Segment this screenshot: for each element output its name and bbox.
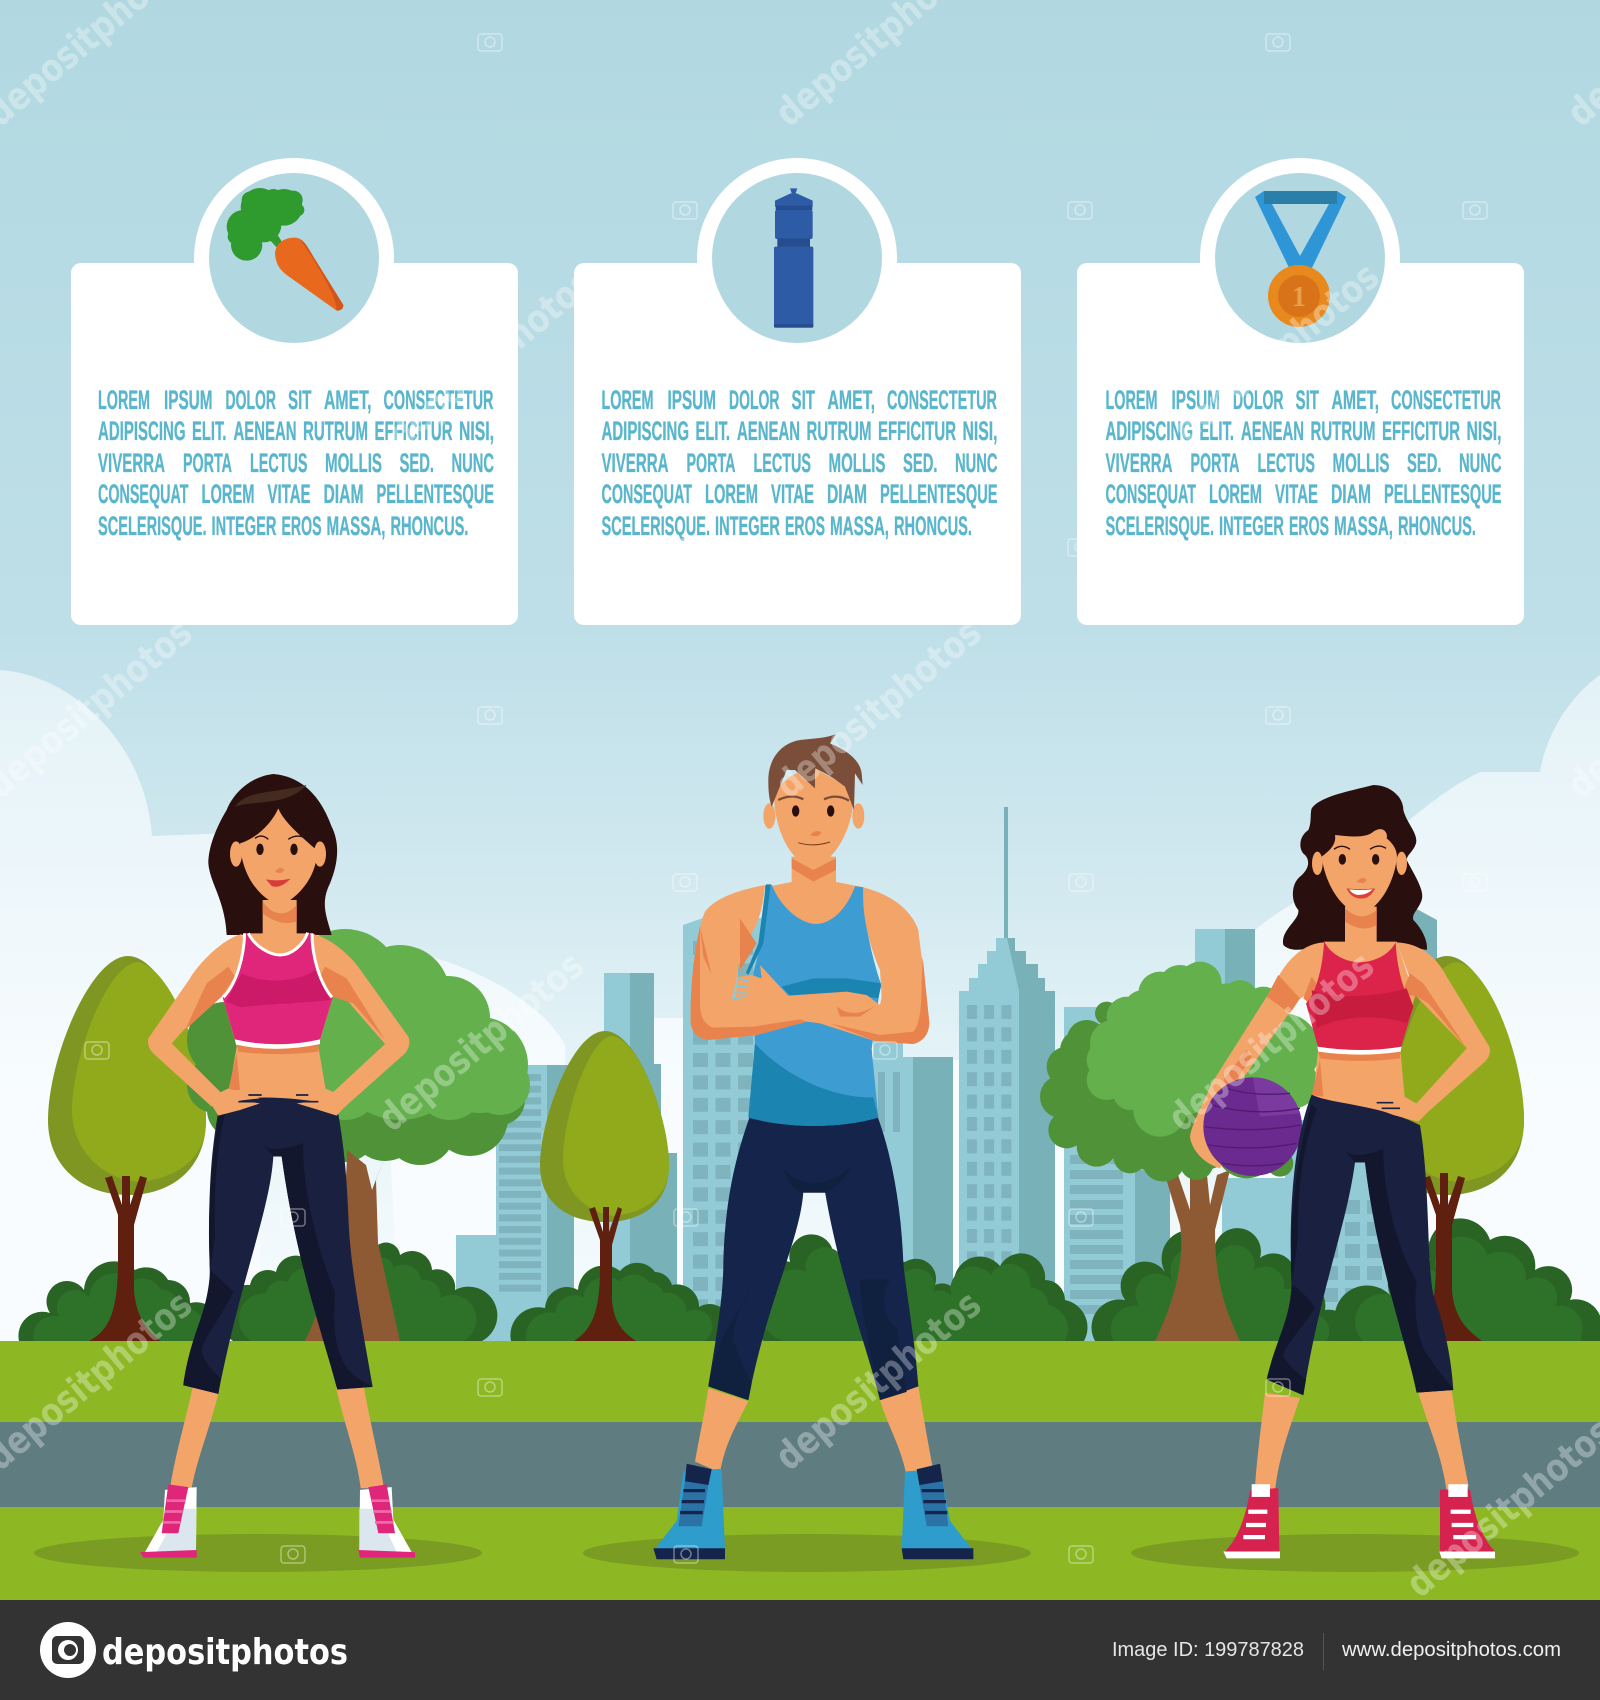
face (1312, 829, 1407, 915)
building: right of centre (873, 1035, 953, 1341)
shoe right (1439, 1484, 1495, 1558)
tree: round green right (1040, 962, 1320, 1341)
crossed arms (691, 885, 929, 1044)
building: centre tower (683, 918, 770, 1341)
text block: DIAM (1331, 479, 1371, 509)
text block: IPSUM (1172, 385, 1220, 415)
shoe left (1223, 1484, 1280, 1558)
text block: INTEGER (212, 511, 276, 541)
text block (98, 385, 494, 541)
text block: NUNC (452, 448, 494, 478)
text block: CONSECTETUR (384, 385, 494, 415)
text block: DOLOR (226, 385, 276, 415)
text block: NUNC (1459, 448, 1502, 478)
panel: nutrition card (71, 158, 518, 625)
text block: ELIT. (192, 416, 226, 446)
upper body (691, 734, 929, 1044)
text block: IPSUM (164, 385, 212, 415)
icon circle (209, 173, 379, 343)
text block: SED. (903, 448, 938, 478)
text block: RUTRUM (806, 416, 872, 446)
panel: hydration card (574, 158, 1021, 625)
text block: ELIT. (696, 416, 730, 446)
text block: EFFICITUR (1382, 416, 1460, 446)
text block: SIT (1296, 385, 1319, 415)
text block: MOLLIS (828, 448, 886, 478)
logo wordmark: depositphotos (102, 1632, 348, 1673)
text block: PELLENTESQUE (880, 479, 998, 509)
watermarks: depositphotos (370, 943, 592, 1140)
legs (140, 1097, 415, 1558)
text block: MOLLIS (325, 448, 382, 478)
chest (765, 882, 863, 950)
hands on hips (212, 1088, 343, 1116)
building: striped block (496, 1065, 574, 1341)
shoe right (358, 1484, 415, 1558)
icon circle (1215, 173, 1385, 343)
text block: INTEGER (1219, 511, 1284, 541)
text block: LOREM (1106, 385, 1157, 415)
text block: AENEAN (1241, 416, 1304, 446)
text block: IPSUM (668, 385, 716, 415)
text block: NISI, (459, 416, 494, 446)
fingers (733, 978, 750, 999)
text block: INTEGER (715, 511, 780, 541)
watermarks: depositphotos (1165, 254, 1387, 451)
hair (208, 774, 337, 935)
text block: CONSECTETUR (887, 385, 997, 415)
sports top (1306, 941, 1413, 1054)
text block: CONSEQUAT (1106, 479, 1196, 509)
text block: RUTRUM (303, 416, 368, 446)
text block: MASSA, (326, 511, 386, 541)
text block: EFFICITUR (374, 416, 452, 446)
text block: ADIPISCING (98, 416, 186, 446)
text block: PORTA (1190, 448, 1240, 478)
text block: NUNC (955, 448, 998, 478)
calves (170, 1384, 384, 1488)
text block: LECTUS (250, 448, 308, 478)
background: sky (0, 0, 1600, 1345)
tank detail (746, 884, 882, 998)
text block: RHONCUS. (1398, 511, 1476, 541)
calves (1255, 1390, 1469, 1492)
ground: upper grass (0, 1341, 1600, 1422)
clouds (0, 670, 1600, 1345)
leggings (1267, 1095, 1453, 1395)
building: skyscraper with antenna (959, 807, 1055, 1341)
text block (1106, 385, 1502, 541)
text block: AENEAN (234, 416, 296, 446)
watermark camera marks (85, 34, 1487, 1563)
watermarks: depositphotos (1160, 943, 1382, 1140)
text block: DIAM (827, 479, 867, 509)
building: tall stepped block shade (630, 973, 677, 1341)
building: striped right block (1064, 1007, 1170, 1341)
icon circle (712, 173, 882, 343)
figure: woman with exercise ball (1190, 785, 1495, 1558)
text block: AENEAN (737, 416, 800, 446)
building: low left block (456, 1235, 506, 1341)
text block: AMET, (828, 385, 875, 415)
shoe left (140, 1484, 197, 1558)
ground: road (0, 1422, 1600, 1507)
text block: EFFICITUR (878, 416, 956, 446)
figure: man in blue tank top (653, 734, 973, 1559)
calves (695, 1386, 933, 1476)
sports top (223, 933, 333, 1049)
text block: ADIPISCING (602, 416, 689, 446)
face (230, 808, 326, 906)
tree: olive left (48, 956, 206, 1341)
text block: LECTUS (1258, 448, 1315, 478)
text block: CONSECTETUR (1391, 385, 1501, 415)
upper body (1190, 785, 1490, 1176)
shoe right (902, 1464, 973, 1559)
hand on hip (1377, 1095, 1425, 1122)
text block: PELLENTESQUE (376, 479, 494, 509)
text block: RHONCUS. (390, 511, 468, 541)
text block: NISI, (1466, 416, 1502, 446)
ground shadows (34, 1534, 1579, 1572)
tank top (748, 885, 881, 1126)
building: far right blocks (1195, 907, 1512, 1341)
exercise ball (1203, 1077, 1302, 1176)
figure: woman in pink top (140, 774, 415, 1558)
card shape (71, 158, 518, 625)
text block: LECTUS (754, 448, 811, 478)
text block: LOREM (98, 385, 150, 415)
text block: VITAE (268, 479, 310, 509)
text block: DOLOR (729, 385, 780, 415)
hair (1283, 785, 1427, 950)
tree: round green left (187, 929, 530, 1341)
text block: PELLENTESQUE (1384, 479, 1502, 509)
shoe left (653, 1464, 725, 1559)
legs (1223, 1095, 1495, 1558)
leggings (708, 1116, 918, 1400)
text block: VIVERRA (98, 448, 165, 478)
watermarks: depositphotos (767, 1282, 989, 1479)
building: tall stepped block (604, 973, 677, 1341)
text block: SIT (288, 385, 312, 415)
text block: MOLLIS (1332, 448, 1390, 478)
text block: MASSA, (830, 511, 889, 541)
text block: RUTRUM (1310, 416, 1376, 446)
text block: LOREM (705, 479, 758, 509)
arms (148, 934, 409, 1108)
text block: VITAE (1275, 479, 1318, 509)
neck (792, 857, 836, 888)
city skyline (456, 807, 1512, 1341)
website url: www.depositphotos.com (1341, 1639, 1561, 1661)
text block: SIT (792, 385, 815, 415)
panel: achievement card (1077, 158, 1524, 625)
text block: EROS (282, 511, 322, 541)
text block: EROS (785, 511, 825, 541)
upper body (148, 774, 409, 1108)
text block: PORTA (686, 448, 736, 478)
lower body and tank (653, 882, 973, 1559)
text block: AMET, (324, 385, 372, 415)
text block: RHONCUS. (894, 511, 972, 541)
text block: PORTA (183, 448, 232, 478)
icon: carrot with leaves (227, 188, 343, 311)
footer bar (0, 1600, 1600, 1700)
text block: AMET, (1332, 385, 1379, 415)
text block: MASSA, (1334, 511, 1393, 541)
text block: CONSEQUAT (602, 479, 692, 509)
head (763, 734, 864, 868)
text block: LOREM (202, 479, 254, 509)
text block: DIAM (324, 479, 364, 509)
icon: water bottle (774, 188, 813, 328)
text block: NISI, (962, 416, 998, 446)
image id: Image ID: 199787828 (1112, 1639, 1304, 1661)
card shape (1077, 158, 1524, 625)
card shape (574, 158, 1021, 625)
text block: SED. (1407, 448, 1442, 478)
tree: olive right (1368, 956, 1524, 1341)
tree: olive centre (540, 1031, 669, 1341)
torso (223, 900, 333, 1105)
bushes (18, 1218, 1600, 1341)
text block: ELIT. (1200, 416, 1234, 446)
text block: VIVERRA (602, 448, 668, 478)
watermarks: depositphotos (767, 610, 989, 807)
text block: DOLOR (1233, 385, 1284, 415)
text block: EROS (1289, 511, 1329, 541)
icon: medal (1255, 191, 1346, 327)
leggings (183, 1097, 373, 1394)
text block: LOREM (602, 385, 653, 415)
icon: medal: 1 (1292, 282, 1306, 313)
logo mark (40, 1622, 96, 1678)
text block: CONSEQUAT (98, 479, 188, 509)
text block: SCELERISQUE. (98, 511, 206, 541)
text block (602, 385, 998, 541)
ground: lower grass (0, 1507, 1600, 1600)
left arm (1190, 942, 1324, 1168)
footer logo (40, 1622, 348, 1678)
text block: SCELERISQUE. (1106, 511, 1214, 541)
text block: SCELERISQUE. (602, 511, 710, 541)
right arm (1378, 942, 1490, 1122)
text block: ADIPISCING (1106, 416, 1193, 446)
text block: VITAE (771, 479, 814, 509)
text block: LOREM (1209, 479, 1262, 509)
watermarks: depositphotos (379, 260, 601, 457)
text block: VIVERRA (1106, 448, 1172, 478)
neck and torso (1307, 907, 1415, 1118)
text block: SED. (400, 448, 434, 478)
